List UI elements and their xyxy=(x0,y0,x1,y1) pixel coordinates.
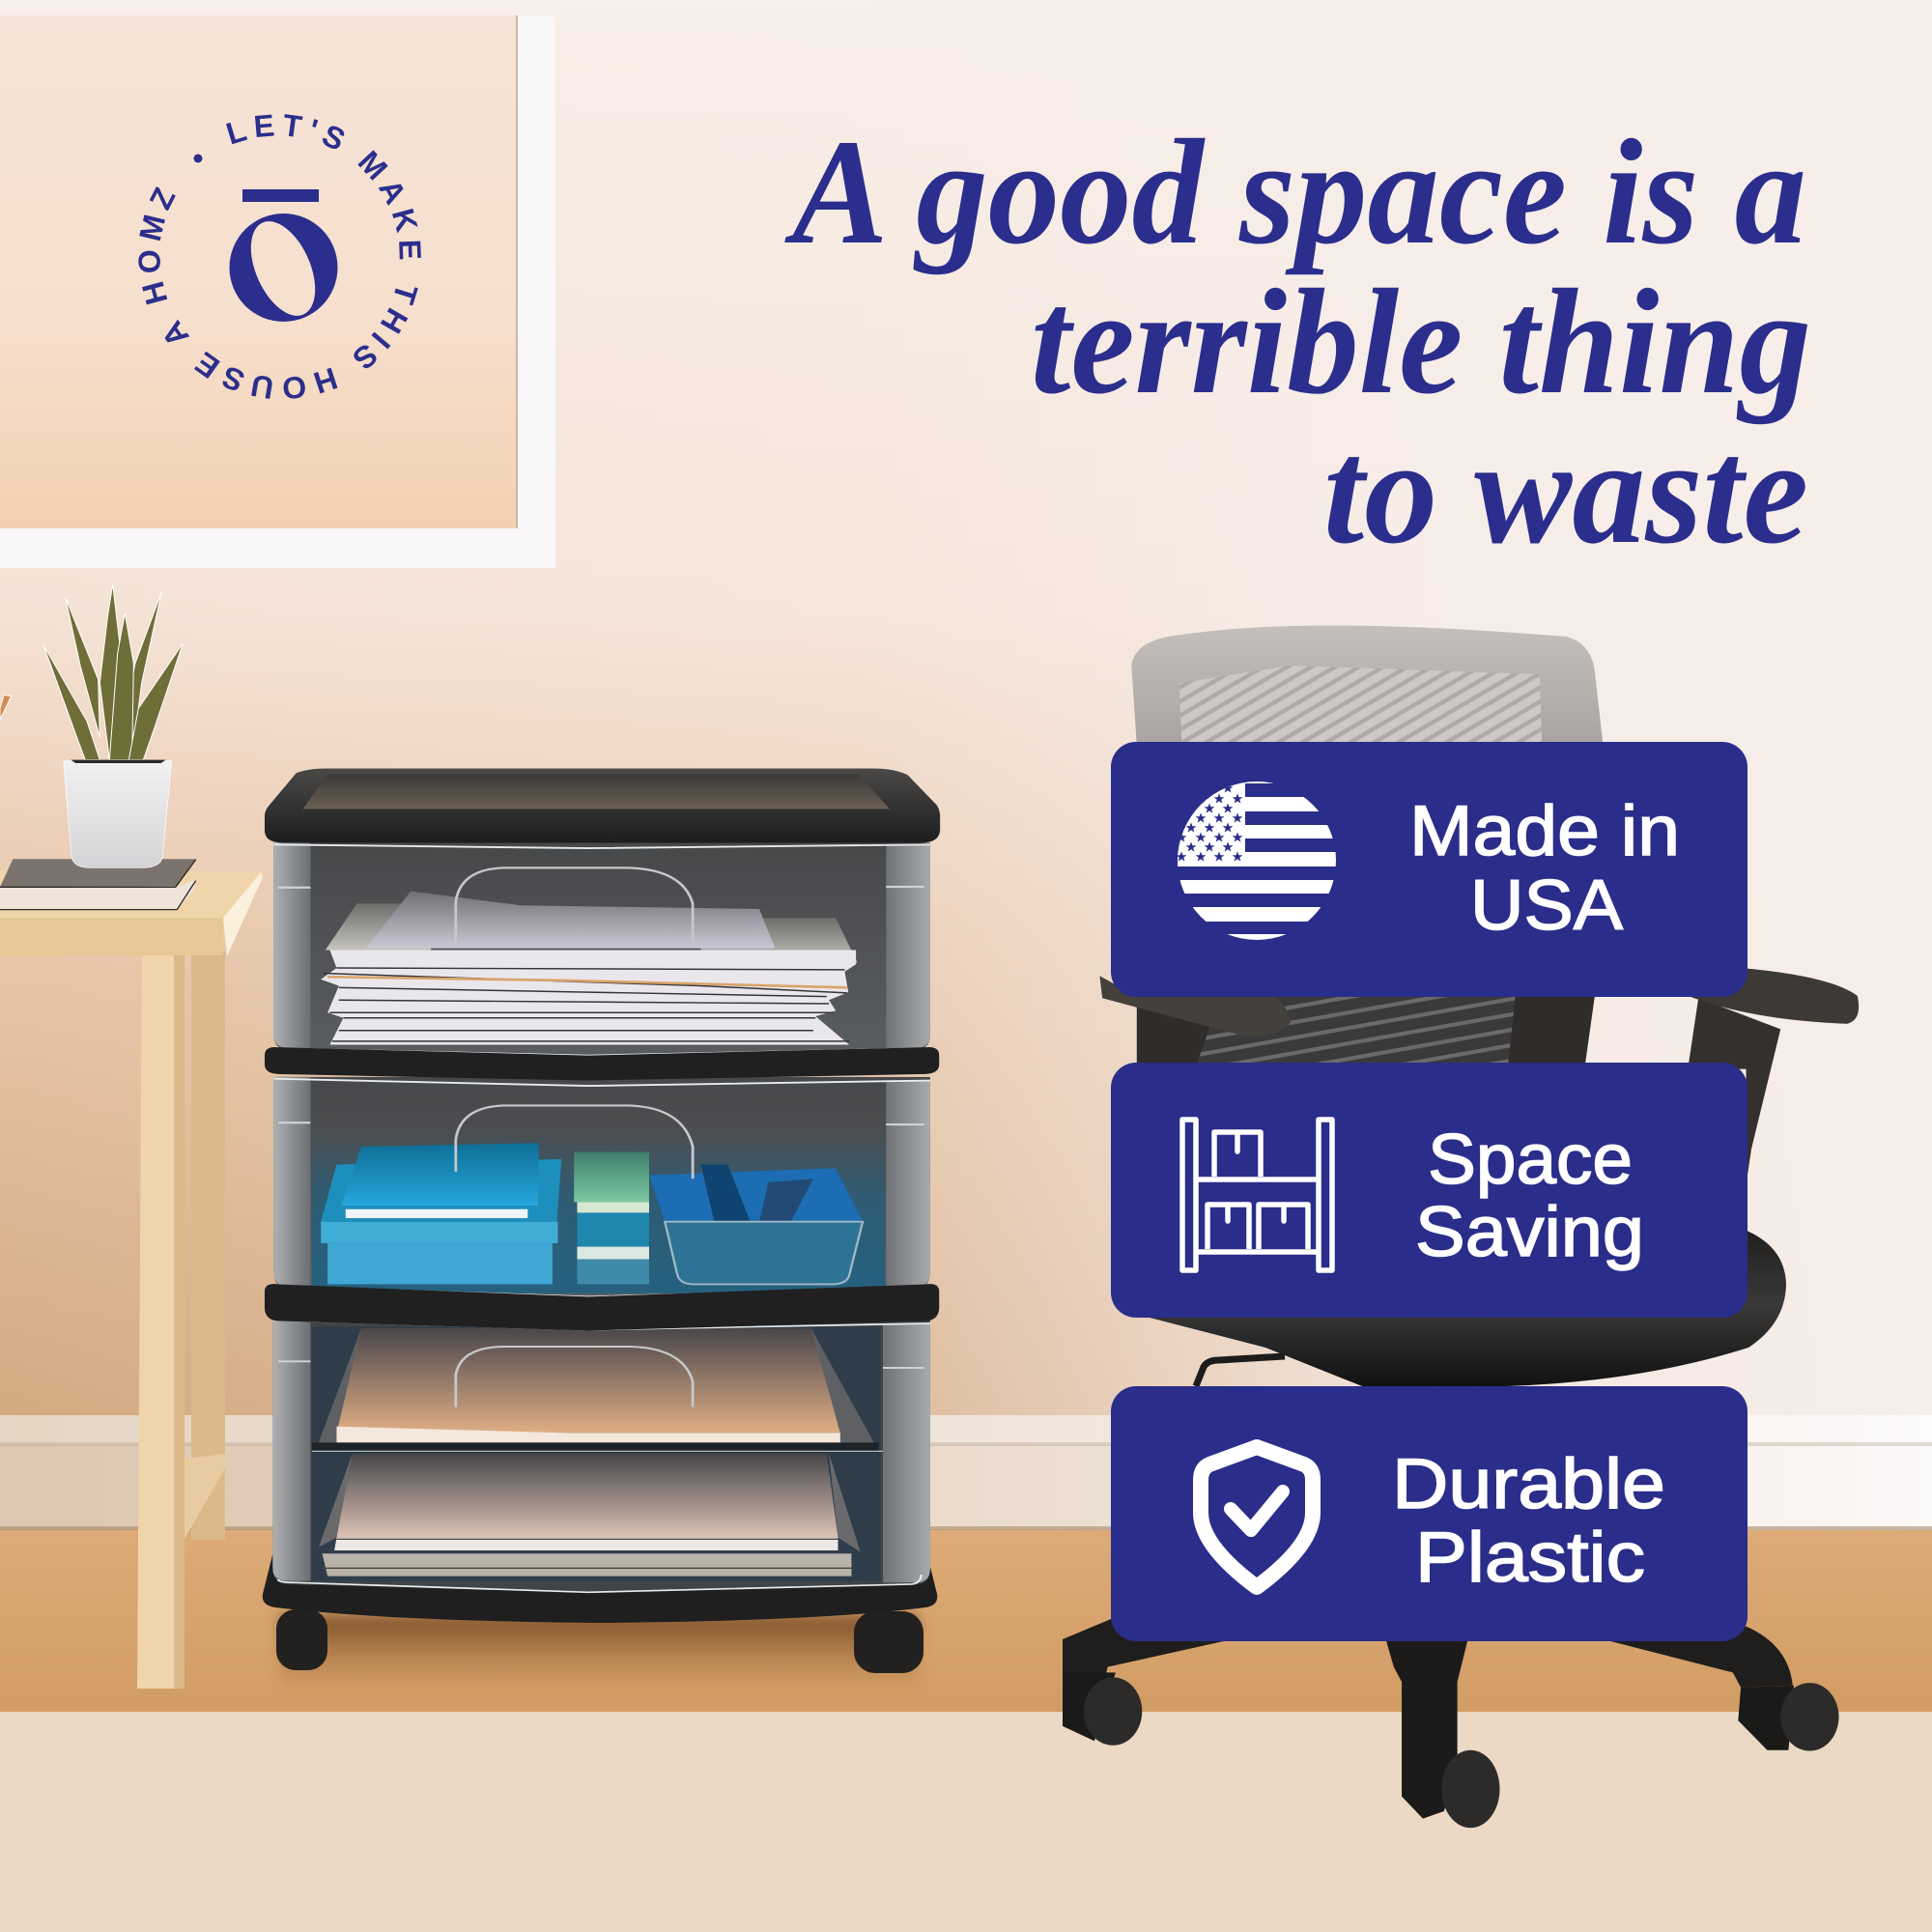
band 3 xyxy=(265,1284,939,1331)
back sheets xyxy=(326,903,431,951)
shelf xyxy=(312,1442,878,1452)
blue book xyxy=(341,1143,539,1206)
logo: circular badge xyxy=(138,114,421,399)
card text: Saving xyxy=(1415,1193,1644,1271)
logo dot xyxy=(193,155,203,162)
seat cushion xyxy=(1150,1222,1786,1386)
lid top recess xyxy=(303,774,890,809)
side table xyxy=(0,871,263,1689)
side panels 2 xyxy=(273,1077,310,1288)
card text xyxy=(1392,1445,1665,1597)
icon: storage shelf xyxy=(1182,1120,1332,1270)
base xyxy=(263,1555,937,1623)
card text: Made in xyxy=(1409,792,1680,870)
base and casters xyxy=(1063,1617,1839,1828)
paper stack xyxy=(321,951,856,1045)
wall background xyxy=(0,0,1932,1536)
icon: american flag xyxy=(1178,781,1336,940)
logo ring text: LET'S MAKE THIS HOUSE A HOMZ xyxy=(138,114,421,399)
carpet xyxy=(0,1712,1932,1932)
tray contents xyxy=(649,1168,863,1222)
drawer 3 xyxy=(272,1321,930,1592)
baseboard xyxy=(0,1415,1932,1530)
lid xyxy=(265,769,940,842)
top sheet xyxy=(366,891,775,949)
book xyxy=(0,859,196,910)
shelf brace xyxy=(184,1454,225,1541)
card text: Space xyxy=(1428,1121,1633,1199)
chair back lower and arms xyxy=(1099,968,1859,1184)
right arm post xyxy=(1688,998,1780,1184)
table top xyxy=(0,871,261,918)
handle 1 xyxy=(456,867,693,943)
seat lever xyxy=(1196,1356,1285,1386)
green file stack xyxy=(574,1152,649,1202)
headline: to waste xyxy=(1323,408,1808,575)
icon: shield with check xyxy=(1201,1447,1313,1587)
left arm xyxy=(1099,976,1291,1037)
wheels xyxy=(276,1609,923,1673)
logo bar xyxy=(242,189,319,202)
card: durable plastic xyxy=(1111,1386,1747,1641)
mesh dark xyxy=(1195,994,1516,1069)
folders xyxy=(319,1328,361,1442)
left caster xyxy=(1084,1677,1142,1746)
pot xyxy=(64,761,172,867)
right caster xyxy=(1780,1683,1839,1751)
headline: terrible thing xyxy=(1031,258,1811,425)
headline: A good space is a xyxy=(783,108,1806,275)
card text xyxy=(1415,1121,1644,1271)
drawer 2 xyxy=(273,1077,930,1298)
orange accent xyxy=(0,695,12,720)
framed wall art xyxy=(0,15,555,568)
wood floor xyxy=(0,1530,1932,1714)
card: made in usa xyxy=(1111,742,1747,997)
card: space saving xyxy=(1111,1063,1747,1318)
headline xyxy=(783,108,1811,575)
card text: Durable xyxy=(1392,1445,1665,1523)
drawer 2 and 1 artwork xyxy=(265,769,940,1331)
potted plant and book xyxy=(0,584,196,910)
side panels xyxy=(272,1321,310,1581)
blue box xyxy=(321,1159,561,1222)
plant leaves xyxy=(43,584,183,760)
handle 3 xyxy=(456,1347,693,1407)
card text: Plastic xyxy=(1415,1519,1645,1597)
paper stack xyxy=(334,1538,838,1550)
logo letter o xyxy=(230,212,338,326)
front leg xyxy=(137,955,185,1689)
table front edge xyxy=(0,918,223,955)
band 2 xyxy=(265,1047,939,1081)
card text: USA xyxy=(1470,867,1623,945)
office chair xyxy=(1063,626,1859,1828)
drawer 1 xyxy=(273,842,930,1056)
back dark xyxy=(1137,994,1595,1069)
card text xyxy=(1409,792,1680,945)
drawer cart xyxy=(263,769,940,1673)
tray front xyxy=(665,1222,863,1284)
mesh light xyxy=(1179,666,1542,746)
side panels 1 xyxy=(273,842,310,1048)
handle 2 xyxy=(456,1105,693,1179)
right arm xyxy=(1688,968,1859,1024)
center caster xyxy=(1441,1750,1500,1828)
chair back upper xyxy=(1131,626,1603,746)
back leg xyxy=(191,952,225,1540)
